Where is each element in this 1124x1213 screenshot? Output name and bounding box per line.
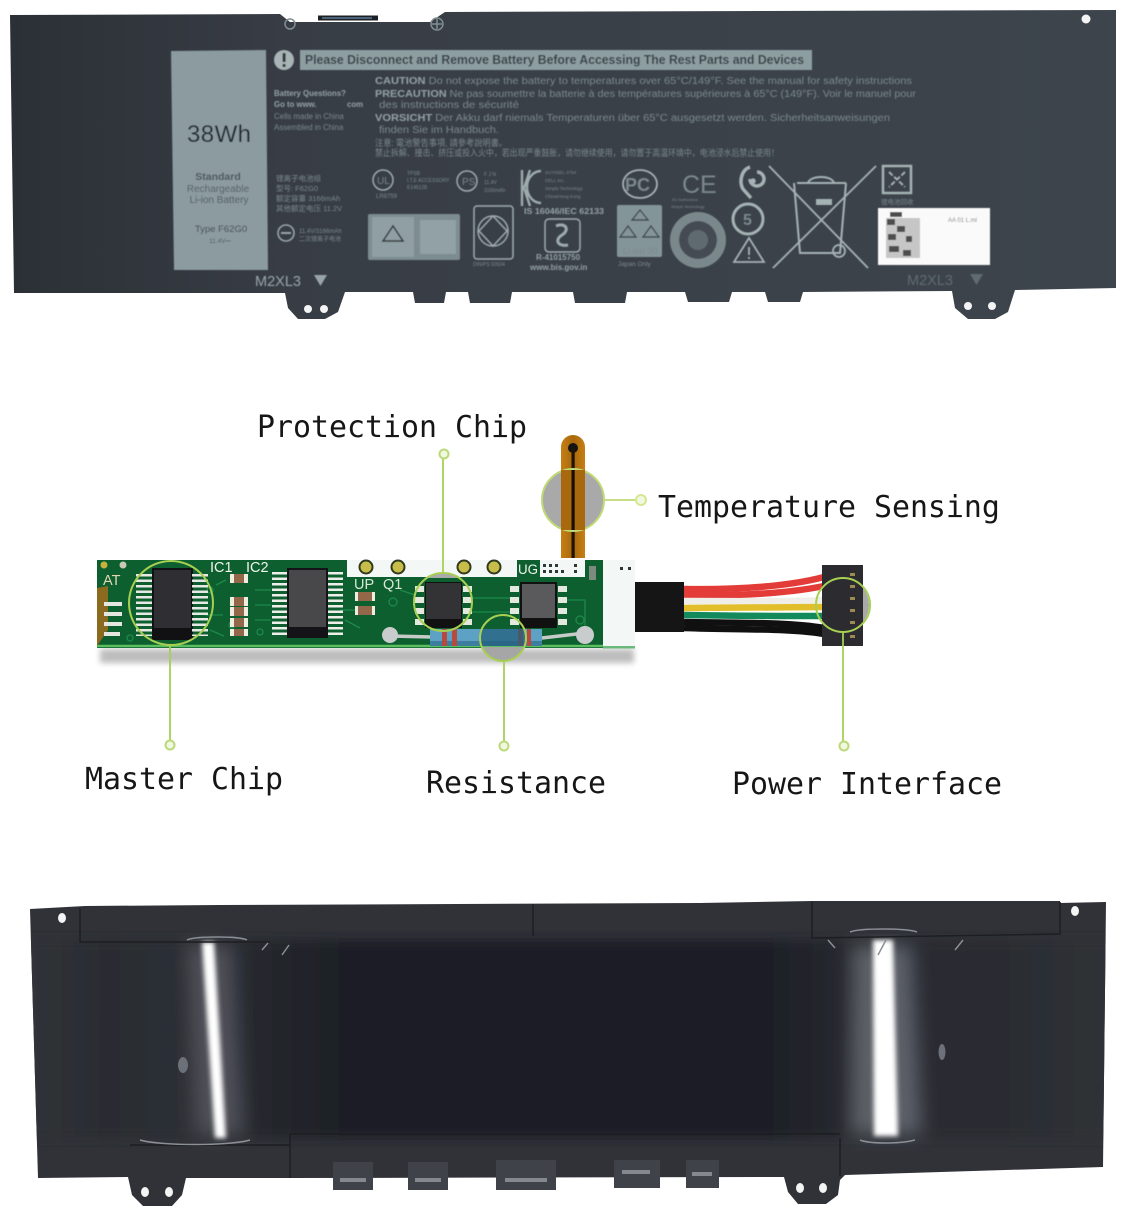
power connector — [822, 565, 863, 646]
part number left: M2XL3 — [255, 274, 301, 290]
warning strip — [274, 50, 812, 70]
capacity label panel: Standard — [195, 171, 241, 183]
side notes: Battery Questions? — [274, 89, 346, 98]
callout: resistance — [480, 615, 526, 750]
capacity label panel: 11.4V⎓ — [209, 238, 231, 245]
certification logos left group: UL — [377, 176, 390, 187]
label: temperature sensing: Temperature Sensing — [658, 490, 1000, 525]
side notes: Assembled in China — [274, 123, 344, 132]
part number left — [255, 274, 327, 290]
certification logos right group: E — [700, 171, 717, 199]
top battery: label side — [10, 10, 1116, 319]
certification logos left group: www.bis.gov.in — [529, 263, 587, 272]
ratings text: 二次锂离子电池 — [299, 235, 341, 243]
board silkscreen text: IC1 — [210, 560, 233, 576]
certification logos left group: DIN/PS 50504 — [473, 262, 505, 268]
rim highlights — [140, 929, 963, 1144]
mounting holes — [304, 14, 1090, 313]
capacity label panel: 38Wh — [187, 121, 251, 148]
certification logos left group: R-41015750 — [536, 253, 581, 262]
caution text block: 注意: 電池警告事項, 請參考說明書。 — [375, 137, 507, 148]
circuit board diagram — [85, 410, 1002, 802]
board silkscreen text: Q1 — [383, 577, 402, 593]
callout: protection chip — [414, 450, 472, 631]
ratings text: 型号: F62G0 — [276, 184, 318, 193]
part number right — [907, 273, 983, 289]
certification logos right group: C — [682, 171, 700, 199]
shaded cell interior — [20, 940, 1120, 1138]
caution text block — [375, 76, 917, 158]
protection chip — [415, 582, 472, 628]
battery casing — [10, 10, 1116, 319]
rim lines — [80, 902, 1060, 1178]
fourth chip — [510, 582, 567, 628]
certification logos right group: 5 — [743, 212, 752, 229]
white board end — [347, 560, 635, 648]
warning strip: Please Disconnect and Remove Battery Before Accessing The Rest Parts and Devices — [305, 53, 804, 67]
certification logos right group: EU Authorized — [672, 197, 698, 202]
board silkscreen text: UP — [354, 577, 374, 593]
certification logos left group: DELL Inc. — [545, 178, 565, 183]
board traces — [127, 580, 585, 641]
certification logos left group: SUY02EL-3764 — [545, 170, 577, 175]
second chip — [280, 568, 336, 638]
caution text block: des instructions de sécurité — [379, 100, 520, 111]
part number right: M2XL3 — [907, 273, 953, 289]
capacity label panel — [171, 50, 268, 270]
certification logos left group: I.T.E ACCESSORY — [407, 178, 450, 184]
solder pads — [360, 560, 500, 574]
certification logos right group: Simplo Technology — [671, 204, 705, 209]
ratings text: 11.4V/3166mAh — [299, 229, 342, 235]
green circuit board — [97, 560, 603, 648]
certification logos right group: 锂电池回收 — [881, 197, 914, 206]
caution text block: PRECAUTION Ne pas soumettre la batterie à des températures supérieures à 65°C (149°F). Voir le manuel pour — [375, 89, 917, 100]
capacity label panel: Type F62G0 — [195, 224, 247, 235]
certification logos right group — [617, 166, 914, 268]
battery casing — [30, 901, 1106, 1206]
white barcode sticker — [878, 208, 990, 265]
cable with coloured wires — [684, 577, 824, 634]
white barcode sticker: AA 01 L.ml — [948, 218, 977, 224]
certification logos left group: 11.4V — [484, 180, 497, 186]
callout: power interface — [816, 578, 870, 750]
label: resistance: Resistance — [426, 766, 606, 801]
caution text block: finden Sie im Handbuch. — [379, 125, 499, 136]
certification logos left group: F J N — [484, 172, 496, 178]
certification logos left group: LR8759 — [376, 194, 398, 200]
label: master chip: Master Chip — [85, 762, 283, 797]
certification logos left group: IS 16046/IEC 62133 — [524, 207, 604, 216]
master chip — [144, 568, 200, 640]
certification logos right group: PC — [625, 175, 650, 195]
ratings text: 锂离子电池组 — [276, 173, 321, 183]
UG marking block — [517, 560, 603, 580]
certification logos left group: TPSB — [407, 171, 421, 177]
ratings text: 额定容量 3166mAh — [276, 193, 340, 203]
label: protection chip: Protection Chip — [257, 410, 527, 445]
side notes: Go to www. — [274, 100, 317, 109]
certification logos right group: Japan Only — [618, 261, 652, 268]
resistor component — [382, 626, 594, 646]
ratings text — [276, 173, 342, 243]
certification logos left group — [368, 170, 604, 272]
board silkscreen text — [103, 560, 402, 593]
corner holes — [58, 906, 1079, 1197]
label: power interface: Power Interface — [732, 767, 1002, 802]
board shadow — [100, 649, 634, 663]
side notes: Cells made in China — [274, 112, 344, 121]
board silkscreen text: AT — [103, 573, 121, 589]
callout: temperature sensing — [542, 469, 646, 531]
certification logos left group: Simplo Technology — [545, 186, 583, 191]
side notes — [274, 89, 363, 132]
white end dots — [620, 567, 631, 570]
dimples — [178, 1044, 946, 1073]
capacity label panel: Li-ion Battery — [190, 195, 248, 206]
UG marking block: UG — [518, 562, 538, 577]
caution text block: CAUTION Do not expose the battery to temperatures over 65°C/149°F. See the manual for safety instructions — [375, 76, 912, 87]
ratings text: 其他额定电压 11.2V — [276, 203, 342, 213]
flex temperature sensor — [561, 435, 585, 558]
certification logos left group: E146128 — [407, 185, 427, 191]
capacity label panel: Rechargeable — [187, 184, 250, 195]
wire housing block — [635, 582, 684, 632]
caution text block: 禁止拆解、撞击、挤压或投入火中，若出现严重鼓胀，请勿继续使用，请勿置于高温环境中，电池浸水后禁止使用！ — [375, 147, 779, 158]
top screw marks — [285, 18, 443, 30]
certification logos right group: Li-ion 00 — [623, 246, 658, 256]
certification logos left group: 3166mAh — [484, 188, 506, 194]
certification logos left group: China/Hong Kong — [545, 194, 581, 199]
bottom battery: back side — [20, 901, 1120, 1206]
side notes: com — [347, 100, 363, 109]
board silkscreen text: IC2 — [246, 560, 269, 576]
caution text block: VORSICHT Der Akku darf niemals Temperaturen über 65°C ausgesetzt werden. Sicherheitsanweisungen — [375, 113, 890, 124]
connector tabs — [333, 1160, 719, 1190]
gold edge contacts — [97, 562, 126, 646]
callout: master chip — [129, 561, 213, 750]
certification logos left group: PS — [462, 177, 476, 188]
small resistors — [230, 574, 375, 636]
